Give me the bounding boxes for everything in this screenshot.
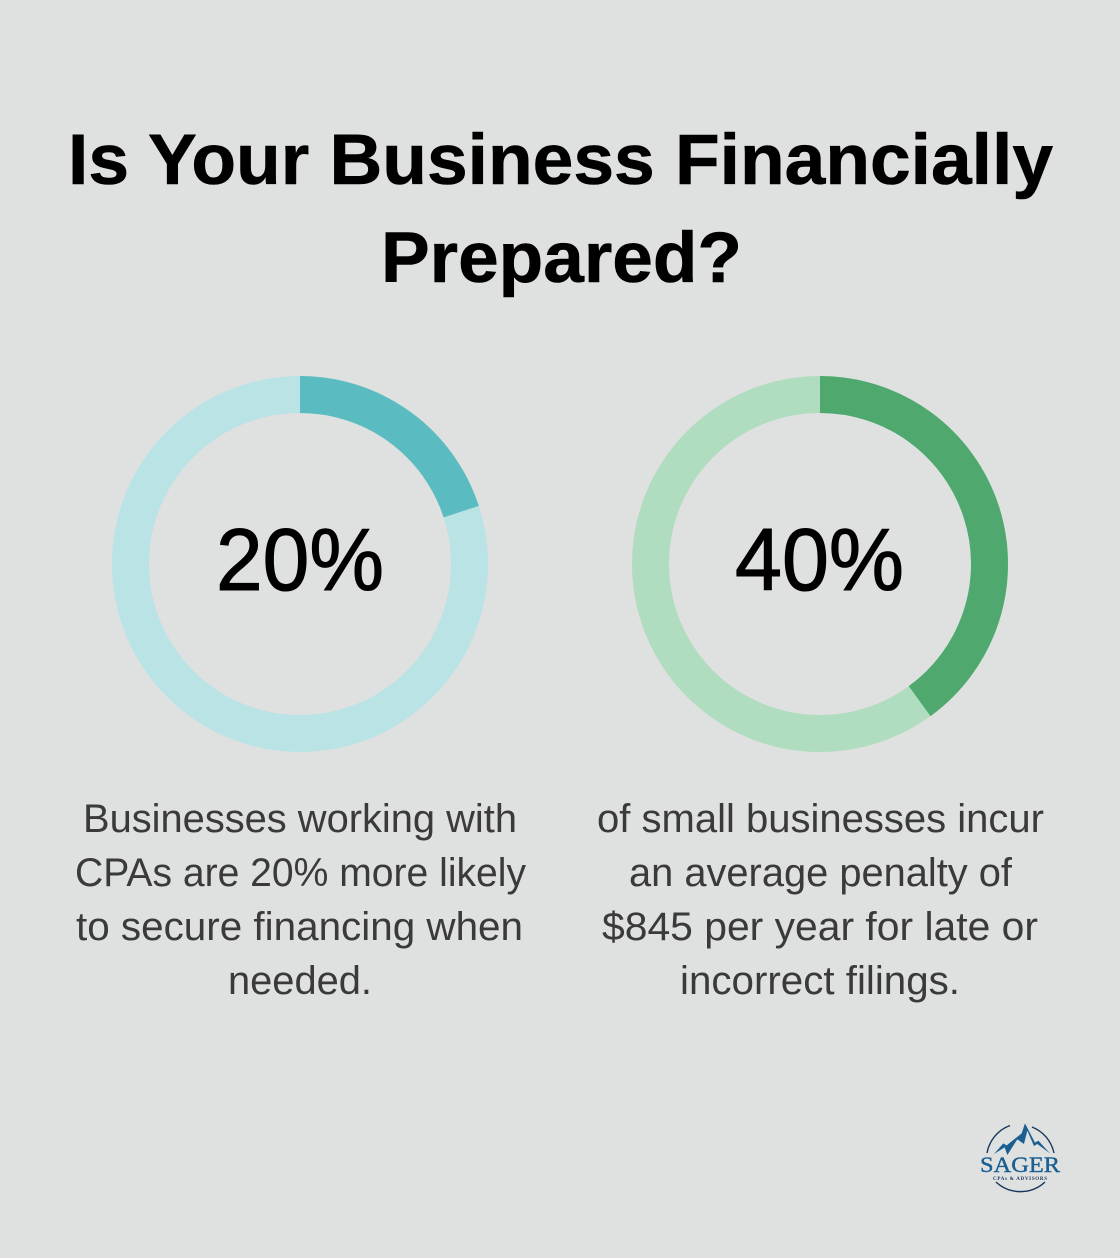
description: financing — [75, 797, 526, 1003]
stat number: 40%: 40% — [735, 510, 904, 609]
donut chart: 40% — [650, 394, 990, 734]
icon: mountain in circle — [987, 1123, 1054, 1192]
description: financing: Businesses working with — [83, 797, 517, 841]
title — [68, 121, 1054, 298]
description: penalties: an average penalty of — [629, 851, 1013, 895]
description: financing: needed. — [228, 959, 372, 1003]
description: penalties: of small businesses incur — [597, 797, 1044, 841]
logo tagline: CPAs & ADVISORS — [993, 1177, 1047, 1182]
logo wordmark: SAGER — [980, 1152, 1060, 1177]
title: Is Your Business Financially — [68, 121, 1054, 200]
donut chart: 20% — [130, 394, 470, 734]
panel: 40% penalty stat — [597, 394, 1044, 1003]
description: financing: CPAs are 20% more likely — [75, 851, 526, 895]
panel: 20% financing stat — [75, 394, 526, 1003]
logo: Sager CPAs & Advisors — [980, 1123, 1060, 1192]
title: Prepared? — [381, 219, 742, 298]
stat number: 20%: 20% — [216, 510, 384, 609]
description: penalties: $845 per year for late or — [602, 905, 1038, 949]
description: financing: to secure financing when — [76, 905, 523, 949]
description: penalties: incorrect filings. — [680, 959, 960, 1003]
description: penalties — [597, 797, 1044, 1003]
